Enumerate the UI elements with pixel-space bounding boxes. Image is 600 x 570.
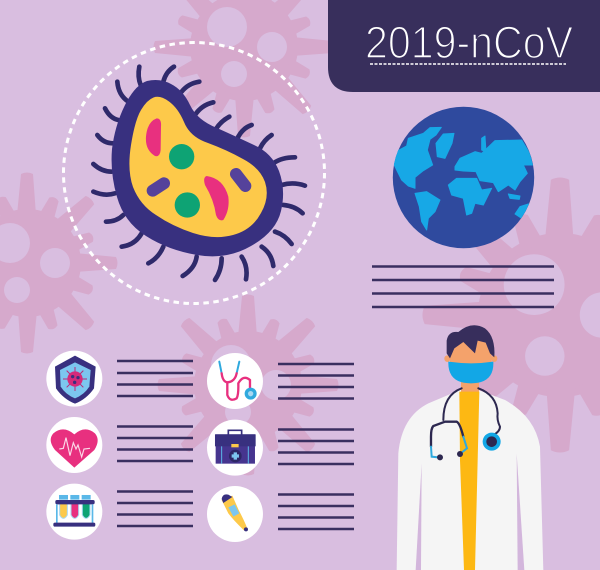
cell body bbox=[112, 80, 283, 256]
placeholder text lines: right column bbox=[278, 364, 354, 529]
background virus: top bbox=[154, 0, 334, 138]
neck bbox=[461, 380, 479, 393]
icon: thermometer bbox=[207, 486, 263, 542]
doctor bbox=[397, 325, 543, 570]
dashed circle around bacterium bbox=[64, 42, 324, 304]
background virus: centre bbox=[158, 294, 338, 476]
globe bbox=[393, 107, 537, 248]
bacterium illustration bbox=[93, 67, 305, 280]
organelles bbox=[146, 118, 245, 220]
icon: medical case bbox=[207, 420, 263, 476]
continents bbox=[393, 127, 537, 230]
cell interior bbox=[129, 97, 267, 237]
head bbox=[450, 340, 492, 370]
placeholder text lines under globe bbox=[372, 266, 554, 307]
placeholder text lines: left column bbox=[117, 361, 193, 526]
icon: virus shield bbox=[46, 351, 102, 407]
flagella bbox=[93, 67, 305, 280]
icon: heart with pulse bbox=[46, 417, 102, 473]
icon: stethoscope bbox=[207, 353, 263, 409]
lab coat bbox=[397, 390, 543, 570]
stethoscope bbox=[431, 388, 500, 457]
header banner bbox=[328, 0, 600, 92]
title: 2019-nCoV bbox=[365, 17, 573, 68]
background virus: left bbox=[0, 172, 118, 354]
shirt bbox=[459, 392, 479, 570]
icon: test tubes rack bbox=[46, 484, 102, 540]
background virus: right bbox=[422, 177, 600, 453]
dotted title underline bbox=[370, 63, 566, 65]
mask bbox=[448, 362, 493, 383]
hair bbox=[447, 325, 494, 358]
